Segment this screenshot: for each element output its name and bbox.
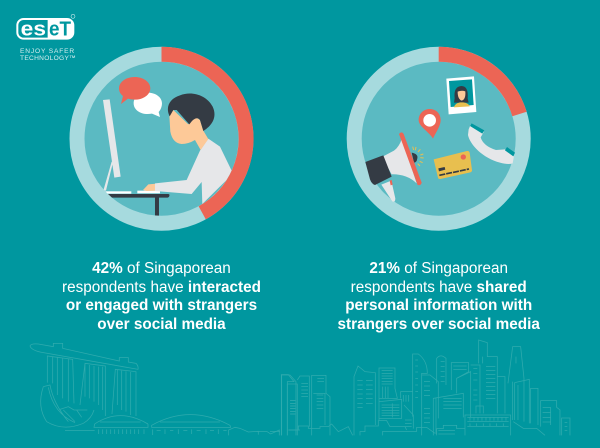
text: 42% caption: 42% of Singaporean [92, 260, 231, 277]
text: 21% caption: respondents have shared [351, 279, 527, 296]
icon: credit card [434, 151, 472, 179]
logo: ESET [17, 14, 76, 62]
panel: interacted with strangers donut [77, 54, 246, 223]
icon: location pin [419, 109, 441, 139]
logo: ESET: eT [49, 17, 71, 40]
text: 42% caption: or engaged with strangers [66, 297, 257, 314]
text: 21% caption: 21% of Singaporean [369, 260, 508, 277]
logo: ESET: TECHNOLOGY™ [20, 55, 76, 62]
text: 21% caption: personal information with [345, 297, 532, 314]
text: 42% caption: over social media [97, 316, 226, 333]
logo: ESET: ENJOY SAFER [20, 48, 75, 55]
icon: telephone handset [468, 123, 515, 164]
skyline: Marina Bay Sands and ArtScience [30, 343, 300, 435]
skyline: downtown towers [270, 340, 570, 435]
icons group [365, 76, 515, 202]
donut: 21% ring [354, 54, 523, 223]
icon: megaphone [365, 132, 424, 202]
illustration: person at computer [103, 77, 232, 216]
text: 42% caption [62, 260, 261, 333]
text: 42% caption: respondents have interacted [62, 279, 261, 296]
icon: photo [446, 76, 476, 114]
donut: 42% ring [77, 54, 246, 223]
inner circle [84, 61, 240, 217]
panel: shared information donut [354, 54, 523, 223]
text: 21% caption [338, 260, 540, 333]
inner circle [361, 61, 517, 217]
logo: ESET: es [21, 17, 46, 40]
text: 21% caption: strangers over social media [338, 316, 540, 333]
